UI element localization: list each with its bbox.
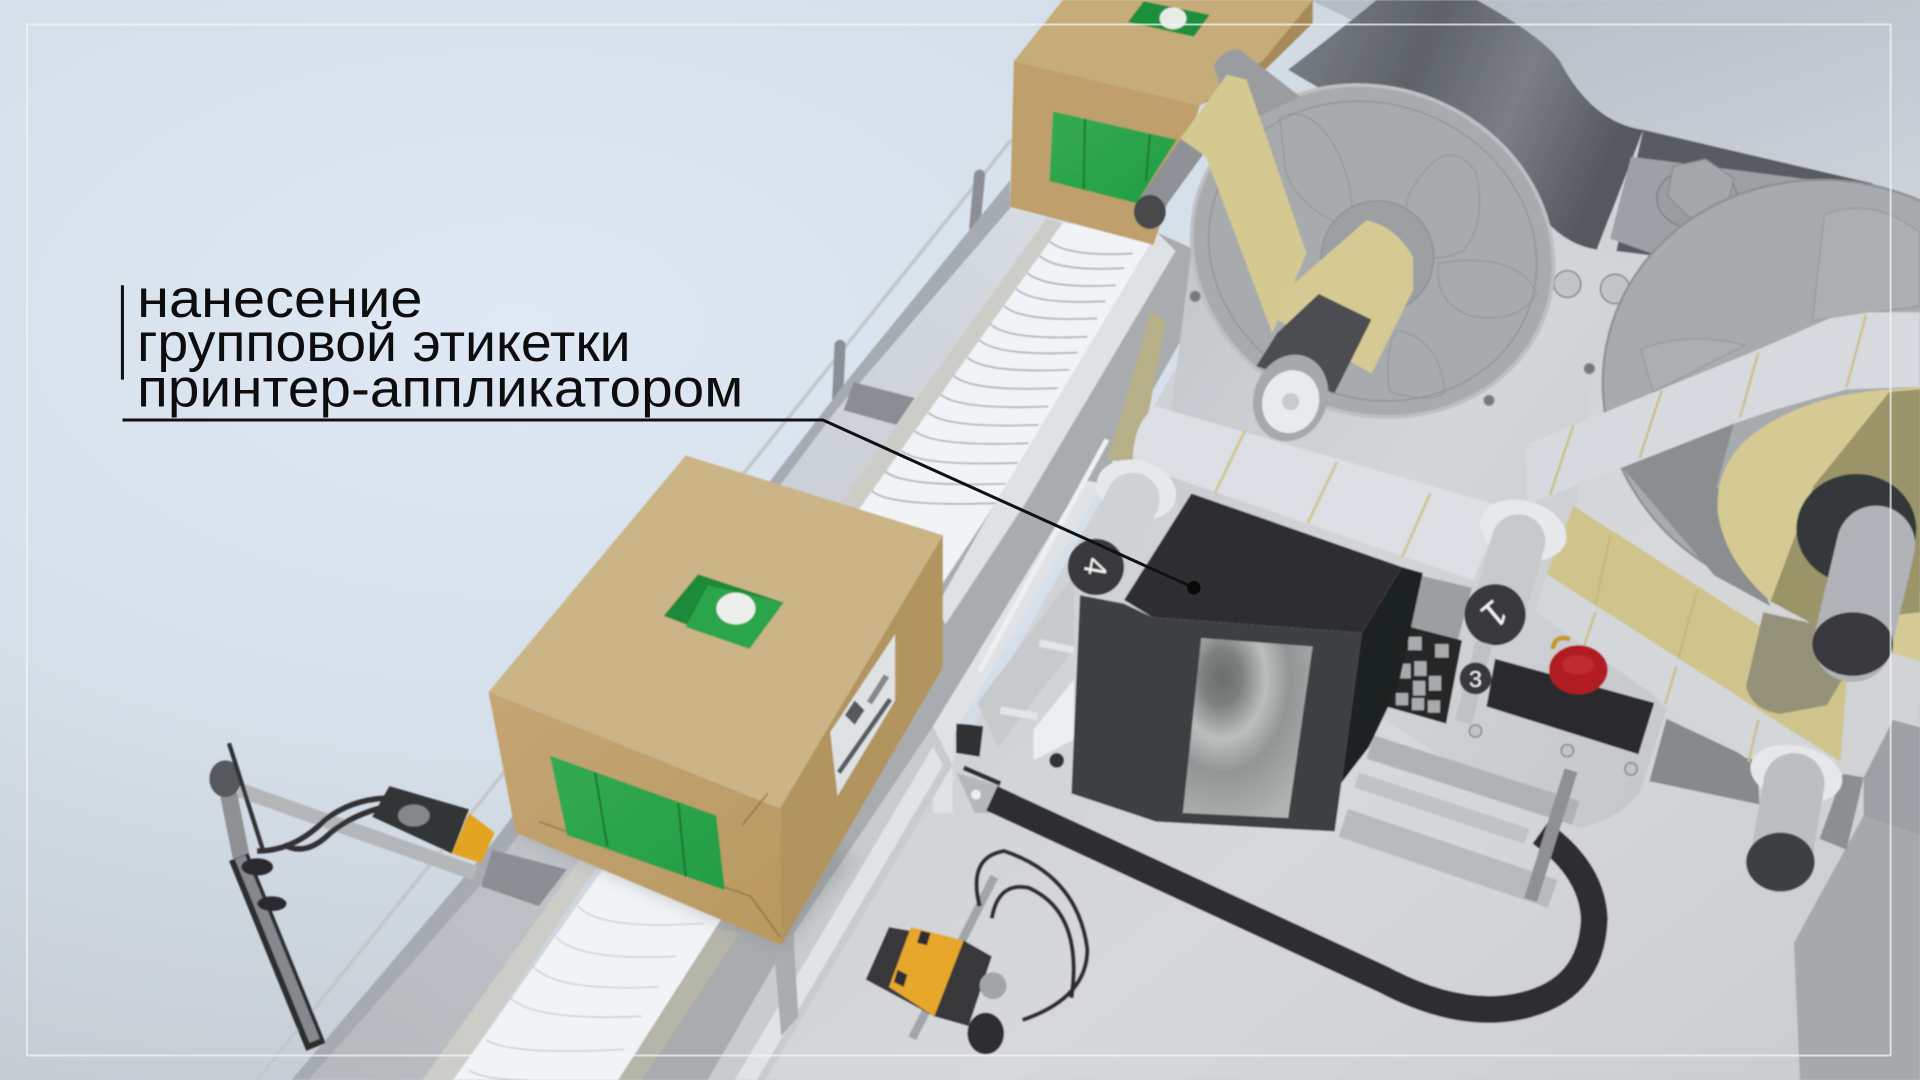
reel: upper spool — [1141, 31, 1604, 471]
floor plate — [759, 159, 1920, 1080]
arm bracket — [1213, 50, 1300, 116]
carton top opening — [1128, 1, 1210, 37]
cables — [229, 743, 407, 851]
spool petals — [1280, 114, 1537, 398]
printer front — [1071, 595, 1362, 831]
yellow roll: right — [1718, 387, 1920, 661]
hub shaft: right — [1812, 545, 1893, 676]
bolt washer — [1657, 168, 1738, 229]
label gaps — [1215, 430, 1430, 557]
label web: upper right — [1527, 312, 1920, 504]
right channel — [618, 233, 1224, 1080]
spool petal — [1812, 208, 1920, 321]
upper right surface — [1310, 0, 1920, 208]
small mechanics — [956, 576, 1074, 768]
keypad panel — [1386, 576, 1472, 724]
yellow ring — [1553, 638, 1570, 649]
label gaps — [1550, 315, 1866, 495]
control panel with stop button — [1487, 638, 1654, 754]
rail clip lower — [774, 933, 798, 1036]
bolt head — [1668, 159, 1734, 218]
sensor marks — [917, 931, 931, 945]
guide wire — [257, 140, 1011, 1080]
barcode label — [830, 634, 895, 796]
pole joints — [209, 760, 241, 797]
mount bracket — [481, 850, 567, 906]
carton window — [1049, 111, 1177, 203]
rail clips — [838, 175, 980, 402]
mounting block with bolt — [1610, 157, 1861, 276]
guide roller — [1134, 140, 1205, 229]
lower belt segments — [469, 906, 704, 1080]
spool inner ring — [1163, 52, 1582, 450]
right wall band upper — [937, 233, 1176, 624]
support arm — [1746, 612, 1843, 714]
roll — [1718, 387, 1920, 661]
machine dark ribbon — [1288, 0, 1643, 250]
thin guide rod — [980, 440, 1107, 671]
callout leader line — [122, 420, 1194, 588]
badge 1: 1 — [1473, 592, 1515, 636]
stop button — [1549, 645, 1608, 694]
spool hub ring — [1321, 201, 1434, 313]
printer window — [1183, 638, 1313, 818]
carton top — [489, 456, 943, 808]
bottom sensor — [866, 851, 1087, 1054]
end cap — [1241, 344, 1340, 452]
sensor connectors — [980, 972, 1007, 999]
callout bar — [121, 285, 124, 380]
dark rear band — [1616, 130, 1873, 263]
carton window — [550, 756, 725, 890]
sensor yellow end — [452, 813, 495, 863]
sensor body — [866, 927, 992, 1026]
label web: main — [1133, 407, 1505, 580]
bottle cap — [716, 593, 756, 624]
badge 3 — [1460, 643, 1491, 722]
carton top opening — [664, 574, 784, 649]
carton right face — [1200, 0, 1313, 105]
roller 4 — [1068, 451, 1183, 595]
right frame blocks — [1794, 720, 1920, 1080]
dark side — [1335, 567, 1423, 831]
box: front carton — [489, 456, 943, 949]
sensor connector — [398, 804, 430, 827]
badge 4: 4 — [1077, 555, 1115, 579]
sensor pole — [912, 877, 994, 1038]
carton left face — [489, 692, 781, 945]
callout text: групповой этикетки — [137, 313, 631, 373]
right lower rail — [708, 726, 953, 1080]
flap seams — [539, 793, 780, 937]
printer top — [1124, 493, 1402, 633]
inner strip — [422, 218, 1063, 1080]
carton shadow — [514, 784, 857, 949]
plate screws — [1190, 271, 1637, 775]
left sensor — [209, 743, 567, 1047]
conveyor — [257, 140, 1224, 1080]
left wall band — [291, 180, 1010, 1080]
left liner strip — [1108, 312, 1166, 465]
spool disc — [1555, 129, 1920, 655]
spool shadowed area — [1622, 424, 1771, 606]
carton right face — [780, 535, 943, 945]
spool disc — [1141, 31, 1604, 471]
callout text: принтер-аппликатором — [137, 359, 743, 419]
dark ring — [1796, 474, 1916, 584]
right bright rail — [933, 480, 1102, 813]
dark core — [1256, 294, 1371, 393]
reel: right spool — [1555, 129, 1920, 655]
carton left face — [1010, 61, 1200, 245]
lower right roller — [1745, 737, 1848, 891]
bottle cap — [1160, 7, 1187, 29]
badge 1 — [1464, 584, 1526, 645]
roll — [1277, 220, 1413, 373]
roller end — [1746, 833, 1815, 891]
sensor body — [372, 786, 469, 853]
carton top — [1014, 0, 1313, 105]
label web: lower right — [1536, 574, 1838, 762]
sensor rods — [1343, 747, 1576, 900]
hub: yellow roll — [1241, 220, 1413, 452]
right wall band lower — [618, 927, 740, 1080]
callout — [122, 269, 1201, 594]
dark wedge right of plate — [1649, 719, 1760, 804]
conveyor belt — [453, 223, 1157, 1080]
roller 1 — [1464, 490, 1573, 645]
roller end — [1134, 195, 1166, 229]
cross bracket — [844, 382, 915, 425]
pole — [227, 784, 241, 857]
main plate — [1163, 135, 1667, 828]
callout text — [137, 269, 743, 419]
sensor mount rod — [239, 790, 475, 873]
sensor tail — [967, 1013, 1004, 1054]
shaft end — [1812, 612, 1893, 676]
left rail plate — [309, 208, 1047, 1080]
liner web — [1180, 75, 1307, 333]
badge 3: 3 — [1469, 666, 1482, 692]
liner web: lower right — [1547, 506, 1847, 762]
roll shadow — [1771, 389, 1920, 624]
callout dot — [1187, 581, 1201, 594]
printer applicator — [1071, 493, 1423, 831]
callout text: нанесение — [137, 269, 422, 329]
upper belt segments — [872, 241, 1133, 504]
bottom drive belt — [956, 768, 1594, 1009]
sensor yellow face — [889, 927, 964, 1016]
box: rear carton — [1010, 0, 1313, 245]
badge 4 — [1068, 539, 1124, 595]
cable loops — [977, 851, 1087, 1020]
